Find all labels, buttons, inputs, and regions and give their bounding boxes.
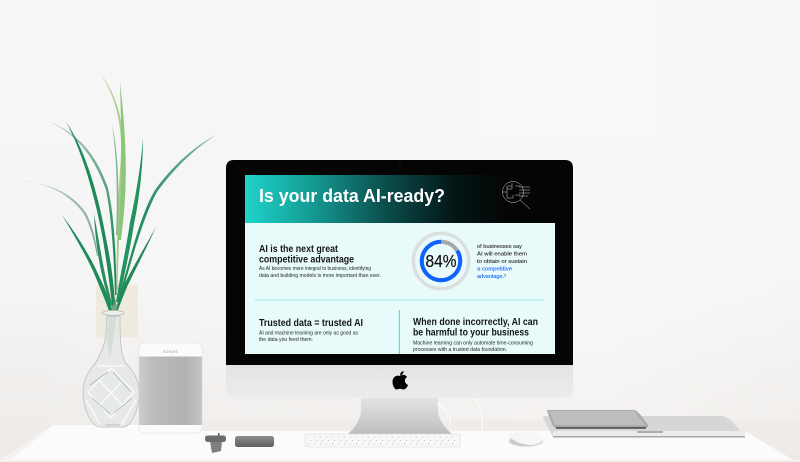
mouse (508, 432, 543, 446)
stat caption: a competitive (477, 266, 512, 272)
section: when done incorrectly (413, 316, 538, 353)
speaker (139, 343, 202, 433)
plant: green blades (14, 73, 216, 358)
monitor body (226, 160, 573, 398)
plant: wall outlet plate (96, 285, 138, 337)
section: when done incorrectly: be harmful to your business (413, 326, 529, 338)
section: when done incorrectly: When done incorrectly, AI can (413, 316, 538, 328)
heading (259, 243, 354, 266)
screen: infographic (245, 175, 555, 354)
section: when done incorrectly: Machine learning can only automate time-consuming (413, 340, 533, 346)
stat caption: to obtain or sustain (477, 259, 527, 265)
body text: data and building models is more important than ever. (259, 273, 381, 279)
divider (255, 300, 544, 301)
speaker: SONOS (163, 350, 178, 354)
stat caption: advantage. (477, 274, 504, 280)
body text (259, 266, 381, 279)
section: trusted data: the data you feed them. (259, 337, 313, 343)
stat caption: of businesses say (477, 244, 522, 250)
stat caption (477, 244, 528, 280)
donut chart: 84%: 84% (426, 251, 456, 271)
body text: As AI becomes more integral to business, identifying (259, 266, 371, 272)
keyboard (305, 434, 460, 447)
watch (205, 433, 226, 453)
donut chart: 84% (413, 233, 469, 289)
desk (0, 425, 800, 462)
icon: circuit magnifier (502, 182, 530, 209)
glass vase (83, 310, 139, 427)
section: trusted data: Trusted data = trusted AI (259, 317, 363, 329)
section: competitive advantage (259, 243, 381, 279)
section: when done incorrectly: processes with a trusted data foundation. (413, 347, 507, 353)
header band (245, 175, 555, 223)
heading: AI is the next great (259, 243, 338, 255)
vertical divider (399, 310, 400, 354)
title: Is your data AI-ready? (259, 185, 445, 206)
stat caption: 3 (504, 274, 506, 278)
section: trusted data: AI and machine learning are only as good as (259, 330, 358, 336)
monitor stand (348, 398, 452, 434)
icon: apple logo (392, 371, 408, 390)
stat caption: AI will enable them (477, 252, 528, 258)
phone (235, 436, 274, 447)
laptop and tablet (543, 410, 745, 438)
section: trusted data (259, 317, 363, 343)
heading: competitive advantage (259, 254, 354, 266)
power cable (437, 398, 482, 430)
